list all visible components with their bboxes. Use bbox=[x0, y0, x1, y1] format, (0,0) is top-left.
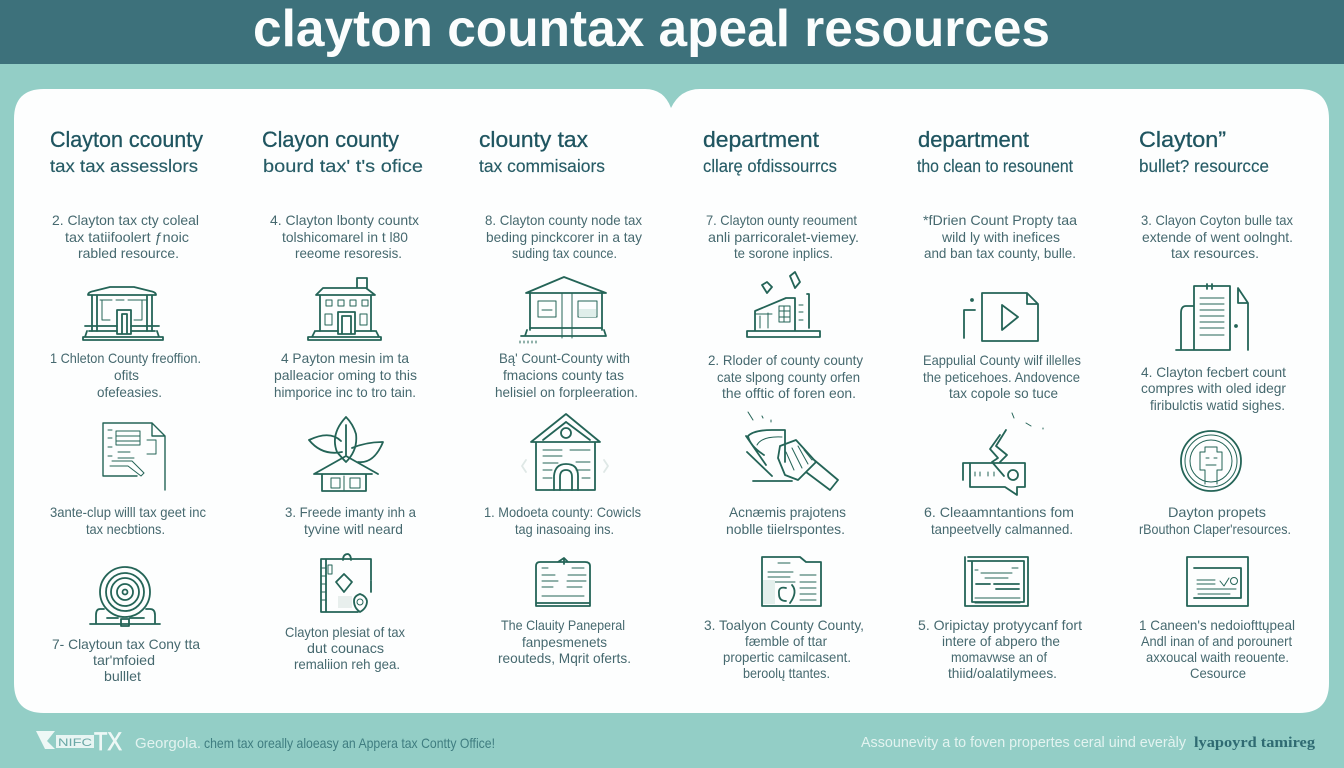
text: row 2 column 5: Eappulial County wilf illelles bbox=[923, 352, 1081, 368]
text: row 3 column 1: 3ante-clup willl tax geet inc bbox=[50, 504, 206, 520]
icon: form document bbox=[103, 423, 165, 490]
text: row 2 column 1 bbox=[50, 350, 201, 400]
text: row 2 column 3: Bą' Count-County with bbox=[499, 350, 630, 366]
heading: column 3 bbox=[479, 127, 605, 176]
text: row 1 column 3: beding pinckcorer in a tay bbox=[486, 229, 642, 245]
text: row 1 column 6: extende of went oolnght. bbox=[1142, 229, 1293, 245]
text: row 4 column 3: reouteds, Mqrit oferts. bbox=[498, 650, 631, 666]
text: row 2 column 4: the offtic of foren eon. bbox=[722, 385, 856, 401]
heading: column 6 bbox=[1139, 127, 1269, 176]
text: row 4 column 2 bbox=[285, 624, 405, 672]
footer logo: NIFC bbox=[58, 737, 92, 749]
text: row 3 column 3: 1. Modoeta county: Cowicls bbox=[484, 504, 641, 520]
text: row 3 column 5: 6. Cleaamntantions fom bbox=[924, 504, 1074, 520]
text: row 4 column 4: propertic camilcasent. bbox=[723, 649, 851, 665]
text: row 4 column 1: bulllet bbox=[104, 668, 141, 684]
text: row 4 column 6: 1 Caneen's nedoiofttųpeal bbox=[1139, 617, 1295, 633]
icon: handshake bbox=[746, 412, 838, 490]
text: row 2 column 5: the peticehoes. Andovence bbox=[923, 369, 1080, 385]
footer left text bbox=[135, 735, 495, 752]
row 1 icons bbox=[83, 272, 1248, 350]
row 2 text blocks bbox=[50, 350, 1286, 413]
heading: column 4: department bbox=[703, 127, 819, 152]
heading: column 2: bourd tax' t's ofice bbox=[263, 156, 423, 176]
text: row 1 column 6 bbox=[1141, 212, 1293, 261]
heading: column 2 bbox=[262, 127, 423, 176]
text: row 1 column 3: suding tax counce. bbox=[512, 245, 617, 261]
text: row 1 column 1 bbox=[52, 212, 199, 261]
heading: column 1: Clayton ccounty bbox=[50, 127, 203, 152]
icon: stacked document bbox=[1176, 284, 1248, 350]
text: row 2 column 2 bbox=[274, 350, 417, 400]
text: row 2 column 1: ofits bbox=[114, 367, 139, 383]
text: row 2 column 4: 2. Rloder of county county bbox=[708, 352, 863, 368]
text: row 3 column 4 bbox=[726, 504, 846, 537]
text: row 4 column 5: momavwse an of bbox=[951, 649, 1047, 665]
text: row 3 column 5: tanpeetvelly calmanned. bbox=[931, 521, 1073, 537]
text: row 3 column 2: 3. Freede imanty inh a bbox=[285, 504, 416, 520]
icon: framed certificate bbox=[965, 557, 1028, 606]
heading: column 4: cllarę ofdissourrcs bbox=[703, 156, 837, 176]
main white panel bbox=[14, 89, 1329, 713]
icon: civic building with seal bbox=[522, 414, 608, 490]
footer right text: Assounevity a to foven propertes ceral uind everàly bbox=[861, 734, 1186, 751]
text: row 3 column 3 bbox=[484, 504, 641, 537]
text: row 2 column 2: 4 Payton mesin im ta bbox=[281, 350, 409, 366]
text: row 2 column 4 bbox=[708, 352, 863, 401]
text: row 3 column 6: rBouthon Claper'resources. bbox=[1139, 521, 1291, 537]
icon: circular seal bbox=[1181, 431, 1241, 491]
text: row 1 column 5: *fDrien Count Propty taa bbox=[923, 212, 1077, 228]
icon: gabled house bbox=[520, 277, 606, 343]
text: row 4 column 5: intere of abpero the bbox=[942, 633, 1060, 649]
text: row 3 column 6 bbox=[1139, 504, 1291, 537]
text: row 1 column 4: te sorone inplics. bbox=[734, 245, 833, 261]
text: row 1 column 2: reeome resoresis. bbox=[295, 245, 402, 261]
text: row 4 column 5: 5. Oripictay protyycanf fort bbox=[918, 617, 1082, 633]
text: row 4 column 1 bbox=[52, 636, 200, 684]
text: row 4 column 4: fæmble of ttar bbox=[745, 633, 827, 649]
text: row 4 column 2: Clayton plesiat of tax bbox=[285, 624, 405, 640]
heading: column 5 bbox=[917, 127, 1073, 176]
text: row 4 column 6 bbox=[1139, 617, 1295, 681]
text: row 3 column 1: tax necbtions. bbox=[86, 521, 165, 537]
text: row 3 column 1 bbox=[50, 504, 206, 537]
text: row 1 column 4: 7. Clayton ounty reoument bbox=[706, 212, 857, 228]
text: row 1 column 3: 8. Clayton county node tax bbox=[485, 212, 642, 228]
icon: target on stand bbox=[90, 567, 160, 626]
icon: office building with sparkles bbox=[747, 272, 820, 337]
text: row 2 column 5: tax copole so tuce bbox=[949, 385, 1058, 401]
row 2 icons bbox=[103, 412, 1241, 495]
text: row 4 column 3: The Clauity Paneperal bbox=[501, 617, 625, 633]
text: row 1 column 1: tax tatiifoolert ƒnoic bbox=[65, 229, 189, 245]
icon: courthouse bbox=[83, 287, 163, 340]
text: row 2 column 6: 4. Clayton fecbert count bbox=[1141, 364, 1286, 380]
text: row 1 column 1: rabled resource. bbox=[78, 245, 179, 261]
text: row 2 column 1: ofefeasies. bbox=[97, 384, 162, 400]
text: row 4 column 4 bbox=[704, 617, 864, 681]
header band bbox=[0, 0, 1344, 64]
text: row 2 column 6: compres with oled idegr bbox=[1141, 380, 1286, 396]
heading: column 5: department bbox=[918, 127, 1029, 152]
heading: column 5: tho clean to resounent bbox=[917, 156, 1073, 176]
icon: folder document bbox=[762, 557, 821, 606]
text: row 4 column 1: tar'mfoied bbox=[93, 652, 155, 668]
text: row 3 column 3: tag inasoaing ins. bbox=[515, 521, 614, 537]
text: row 1 column 6: tax resources. bbox=[1171, 245, 1259, 261]
row 3 text blocks bbox=[50, 504, 1291, 537]
heading: column 3: clounty tax bbox=[479, 127, 588, 152]
text: row 4 column 6: Andl inan of and porounert bbox=[1141, 633, 1292, 649]
text: row 3 column 5 bbox=[924, 504, 1074, 537]
text: row 3 column 6: Dayton propets bbox=[1168, 504, 1266, 520]
text: row 2 column 3: fmacions county tas bbox=[503, 367, 624, 383]
text: row 4 column 5 bbox=[918, 617, 1082, 681]
heading: column 2: Clayon county bbox=[262, 127, 399, 152]
text: row 4 column 6: Cesource bbox=[1190, 665, 1246, 681]
heading: column 6: Clayton” bbox=[1139, 127, 1226, 152]
text: row 2 column 3: helisiel on forpleeration. bbox=[495, 384, 638, 400]
text: row 2 column 2: palleacior oming to this bbox=[274, 367, 417, 383]
text: row 4 column 5: thiid/oalatilymees. bbox=[948, 665, 1057, 681]
text: row 1 column 5: wild ly with inefices bbox=[941, 229, 1060, 245]
heading: column 3: tax commisaiors bbox=[479, 156, 605, 176]
icon: checklist with badge bbox=[321, 554, 371, 612]
text: row 4 column 1: 7- Claytoun tax Cony tta bbox=[52, 636, 200, 652]
icon: document with play symbol bbox=[964, 293, 1038, 341]
text: row 1 column 3 bbox=[485, 212, 642, 261]
footer logo bbox=[36, 728, 122, 756]
text: row 2 column 4: cate slpong county orfen bbox=[717, 369, 860, 385]
row 4 text blocks bbox=[52, 617, 1295, 684]
text: row 1 column 4 bbox=[706, 212, 859, 261]
text: row 4 column 4: 3. Toalyon County County, bbox=[704, 617, 864, 633]
icon: chat bubble with spark bbox=[963, 413, 1043, 495]
text: row 2 column 1: 1 Chleton County freoffion. bbox=[50, 350, 201, 366]
text: row 2 column 2: himporice inc to tro tain. bbox=[274, 384, 416, 400]
text: row 4 column 3 bbox=[498, 617, 631, 666]
heading: column 6: bullet? resourcce bbox=[1139, 156, 1269, 176]
text: row 3 column 2: tyvine witl neard bbox=[304, 521, 403, 537]
text: row 1 column 4: anli parricoralet-viemey. bbox=[708, 229, 859, 245]
text: row 2 column 6: firibulctis watid sighes. bbox=[1150, 397, 1285, 413]
icon: house with leaves bbox=[309, 417, 383, 491]
text: row 1 column 6: 3. Clayon Coyton bulle tax bbox=[1141, 212, 1293, 228]
icon: house with chimney bbox=[308, 278, 381, 340]
heading: column 1 bbox=[50, 127, 203, 176]
text: row 1 column 2 bbox=[270, 212, 419, 261]
text: row 1 column 5: and ban tax county, bulle. bbox=[924, 245, 1076, 261]
icon: notice board bbox=[536, 558, 590, 606]
row 3 icons bbox=[90, 554, 1248, 626]
text: row 2 column 5 bbox=[923, 352, 1081, 401]
title: clayton countax apeal resources bbox=[253, 0, 1050, 58]
footer left text: chem tax oreally aloeasy an Appera tax Contty Office! bbox=[204, 735, 495, 751]
icon: framed checkmark panel bbox=[1187, 557, 1248, 606]
text: row 4 column 2: dut counacs bbox=[307, 640, 384, 656]
heading: column 1: tax tax assesslors bbox=[50, 156, 198, 176]
text: row 2 column 6 bbox=[1141, 364, 1286, 413]
text: row 4 column 3: fanpesmenets bbox=[522, 634, 607, 650]
text: row 2 column 3 bbox=[495, 350, 638, 400]
heading: column 4 bbox=[703, 127, 837, 176]
footer left text: Georgola. bbox=[135, 735, 201, 752]
text: row 4 column 2: remaliion reh gea. bbox=[294, 656, 400, 672]
row 1 text blocks bbox=[52, 212, 1293, 261]
footer logo: TX bbox=[94, 728, 122, 756]
text: row 3 column 2 bbox=[285, 504, 416, 537]
text: row 1 column 2: 4. Clayton lbonty countx bbox=[270, 212, 419, 228]
text: row 1 column 2: tolshicomarel in t l80 bbox=[282, 229, 408, 245]
footer right text: lyapoyrd tamireg bbox=[1194, 735, 1316, 751]
text: row 3 column 4: noblle tiielrspontes. bbox=[726, 521, 845, 537]
text: row 1 column 1: 2. Clayton tax cty coleal bbox=[52, 212, 199, 228]
text: row 3 column 4: Acnæmis prajotens bbox=[729, 504, 846, 520]
text: row 1 column 5 bbox=[923, 212, 1077, 261]
text: row 4 column 4: beroolų ttantes. bbox=[743, 665, 830, 681]
column headings bbox=[50, 127, 1269, 176]
text: row 4 column 6: axxoucal waith reouente. bbox=[1146, 649, 1289, 665]
